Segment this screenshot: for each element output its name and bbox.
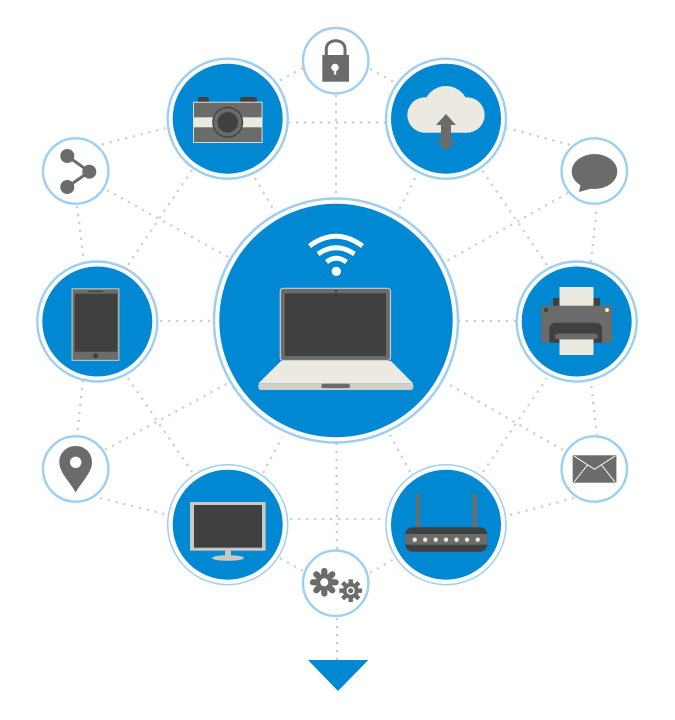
- dotted connection lines: [77, 68, 597, 660]
- node: padlock: [303, 28, 368, 93]
- node: map pin: [43, 436, 108, 502]
- node: envelope: [562, 436, 627, 502]
- central hub: laptop with wifi: [214, 198, 458, 442]
- arrow: down: [308, 660, 368, 691]
- node: gears: [303, 551, 368, 616]
- node: router: [386, 465, 506, 585]
- node: camera: [168, 59, 288, 179]
- node: tablet: [37, 262, 157, 382]
- node: speech bubble: [562, 138, 627, 204]
- node: share: [43, 138, 108, 204]
- icon: laptop: [258, 288, 413, 390]
- icon: wifi: [310, 236, 362, 276]
- node: printer: [517, 262, 637, 382]
- node: cloud transfer: [386, 59, 506, 179]
- node: monitor: [168, 465, 288, 585]
